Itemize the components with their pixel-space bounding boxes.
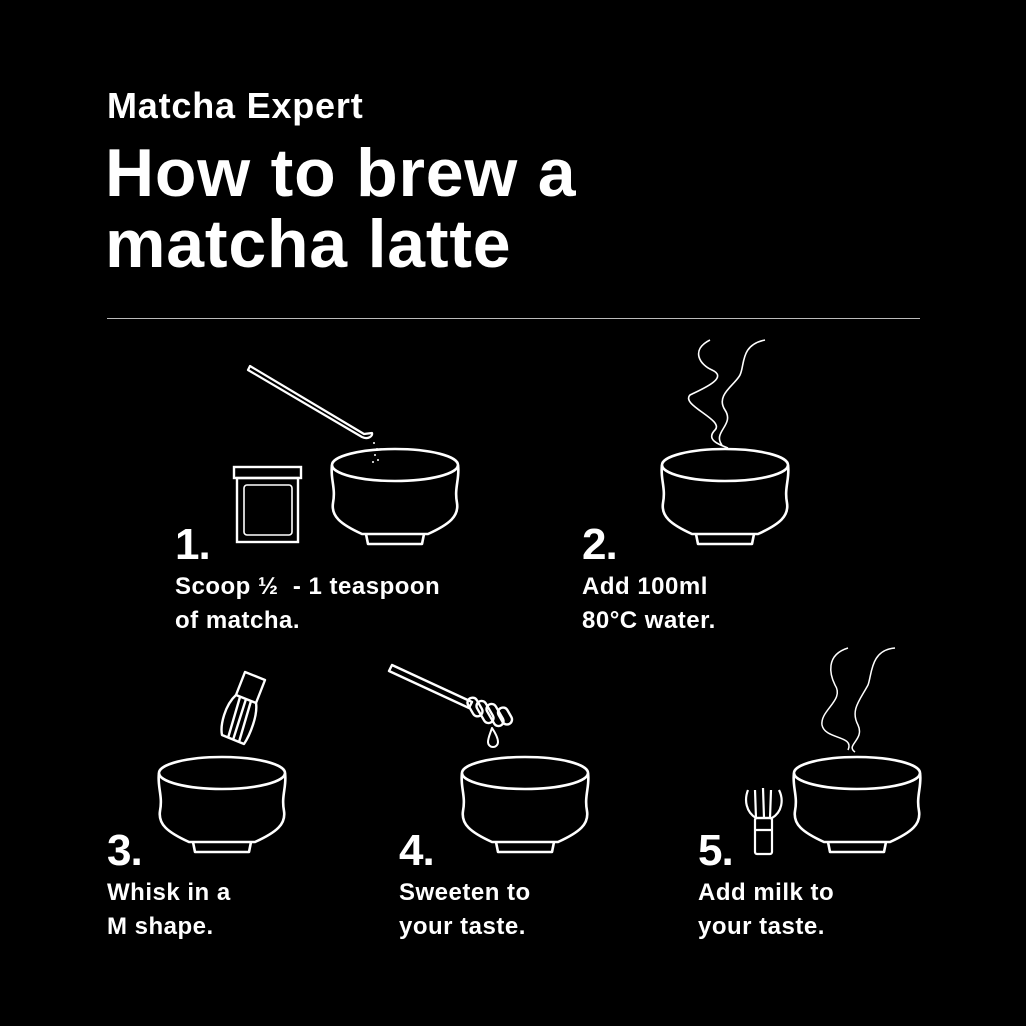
icon: step 3 whisk and bowl (159, 672, 285, 852)
step 3: 3. (107, 826, 142, 875)
step 5: your taste. (698, 913, 825, 940)
step 5: 5. (698, 826, 733, 875)
divider (107, 318, 920, 320)
step 1: 1. (175, 520, 210, 569)
step 2: 2. (582, 520, 617, 569)
step 2 (582, 520, 716, 634)
icon: step 4 honey dipper and bowl (389, 665, 588, 852)
icon: step 2 steaming bowl (662, 340, 788, 544)
step 3: M shape. (107, 913, 214, 940)
icon: step 5 whisk, steam and bowl (746, 648, 920, 854)
step 5 (698, 826, 834, 940)
step 4: Sweeten to (399, 879, 531, 906)
step 3 (107, 826, 231, 940)
icon: step 1 jar, scoop, bowl (234, 366, 458, 544)
subtitle: Matcha Expert (107, 85, 363, 126)
step 2: Add 100ml (582, 573, 708, 600)
step 2: 80°C water. (582, 607, 716, 634)
step 1: of matcha. (175, 607, 300, 634)
step 5: Add milk to (698, 879, 834, 906)
title: matcha latte (105, 206, 511, 282)
step 4: 4. (399, 826, 434, 875)
title (105, 135, 576, 282)
step 4: your taste. (399, 913, 526, 940)
step 4 (399, 826, 531, 940)
step 1: Scoop ½ - 1 teaspoon (175, 573, 440, 600)
step 3: Whisk in a (107, 879, 231, 906)
step 1 (175, 520, 440, 634)
title: How to brew a (105, 135, 576, 211)
